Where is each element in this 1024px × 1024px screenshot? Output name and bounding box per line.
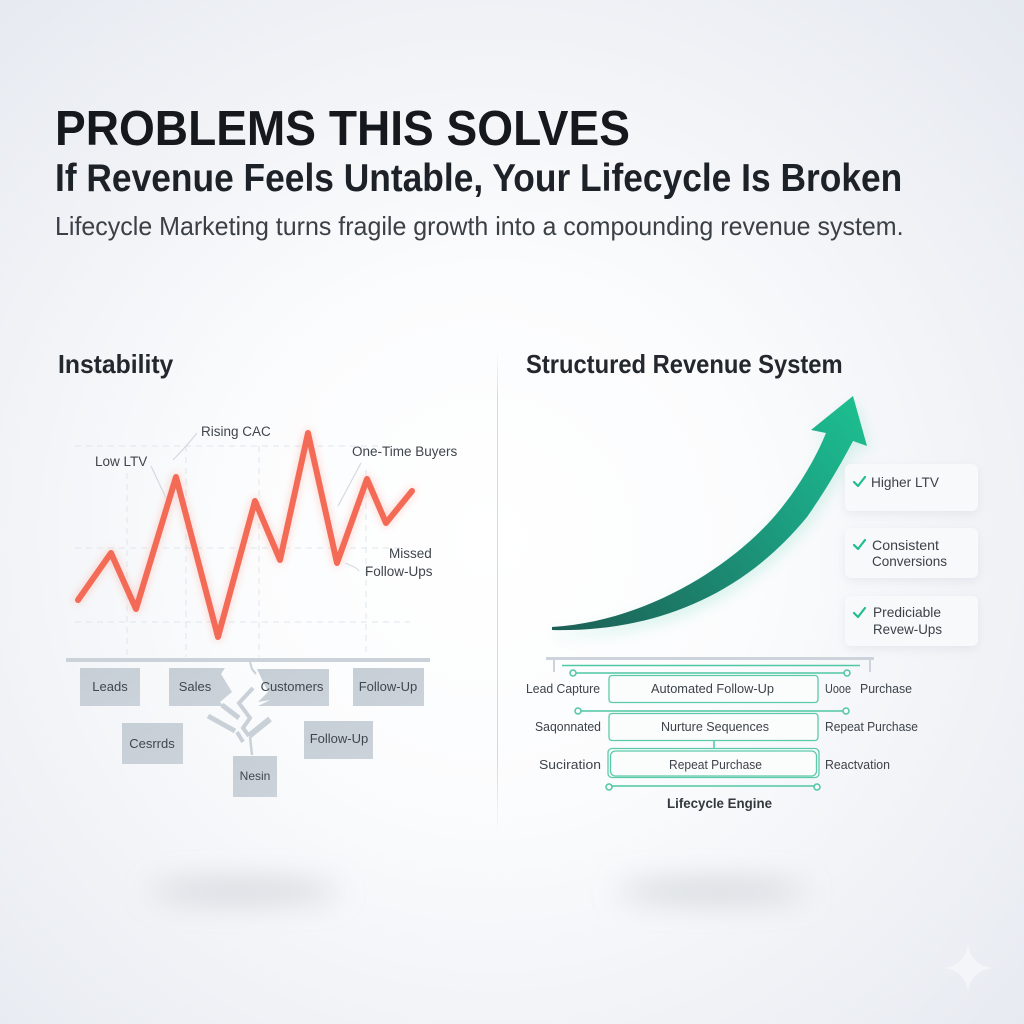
chart callouts: Follow-Ups bbox=[365, 564, 433, 579]
engine labels: Repeat Purchase bbox=[825, 720, 918, 734]
engine labels: Automated Follow-Up bbox=[651, 682, 774, 696]
lifecycle engine diagram bbox=[526, 657, 918, 811]
engine labels: Suciration bbox=[539, 758, 601, 772]
chart callouts bbox=[95, 424, 458, 579]
broken funnel: boxes: Follow-Up bbox=[359, 679, 417, 694]
left panel heading: Instability bbox=[58, 349, 173, 379]
engine caption: Lifecycle Engine bbox=[667, 795, 772, 811]
centre divider bbox=[497, 350, 498, 835]
engine labels bbox=[526, 682, 918, 772]
chart grid bbox=[75, 446, 410, 657]
engine labels: Reactvation bbox=[825, 758, 890, 772]
broken funnel: boxes: Cesrrds bbox=[129, 736, 175, 751]
broken funnel: boxes: Customers bbox=[261, 679, 324, 694]
tagline: Lifecycle Marketing turns fragile growth into a compounding revenue system. bbox=[55, 211, 904, 241]
instability line chart bbox=[78, 433, 412, 637]
benefit card: consistent conversions: Conversions bbox=[872, 553, 947, 569]
benefit card: higher LTV bbox=[845, 464, 978, 511]
subtitle: If Revenue Feels Untable, Your Lifecycle Is Broken bbox=[55, 157, 902, 200]
benefit card: predictable revenue bbox=[845, 596, 978, 646]
engine connectors bbox=[562, 666, 860, 790]
engine labels: Repeat Purchase bbox=[669, 758, 762, 772]
benefit card: predictable revenue: Revew-Ups bbox=[873, 621, 942, 637]
chart callouts: Missed bbox=[389, 546, 432, 561]
broken funnel: boxes: Sales bbox=[179, 679, 212, 694]
benefit card: predictable revenue: Prediciable bbox=[873, 604, 941, 620]
chart callouts: Rising CAC bbox=[201, 424, 271, 439]
chart callouts: One-Time Buyers bbox=[352, 444, 458, 459]
right panel heading: Structured Revenue System bbox=[526, 349, 843, 379]
engine labels: Saqonnated bbox=[535, 720, 601, 734]
icon: sparkle bbox=[944, 944, 992, 992]
broken funnel: boxes: Nesin bbox=[240, 769, 270, 783]
engine boxes bbox=[608, 676, 819, 778]
broken funnel: boxes: Leads bbox=[92, 679, 128, 694]
engine shelf bbox=[546, 657, 874, 672]
broken funnel: crack shards bbox=[208, 662, 270, 755]
benefit card: consistent conversions bbox=[845, 528, 978, 578]
engine labels: Lead Capture bbox=[526, 682, 600, 696]
engine labels: Purchase bbox=[860, 682, 912, 696]
engine labels: Nurture Sequences bbox=[661, 720, 769, 734]
growth arrow bbox=[552, 396, 870, 636]
title: PROBLEMS THIS SOLVES bbox=[55, 102, 630, 156]
benefit card: consistent conversions: Consistent bbox=[872, 537, 939, 553]
engine labels: Uooe bbox=[825, 682, 851, 696]
broken funnel: boxes bbox=[80, 668, 424, 797]
broken funnel: boxes: Follow-Up bbox=[310, 731, 368, 746]
chart callouts: Low LTV bbox=[95, 454, 147, 469]
broken funnel: shelf bbox=[66, 658, 430, 662]
benefit card: higher LTV: Higher LTV bbox=[871, 474, 940, 490]
ground shadows bbox=[150, 883, 807, 899]
